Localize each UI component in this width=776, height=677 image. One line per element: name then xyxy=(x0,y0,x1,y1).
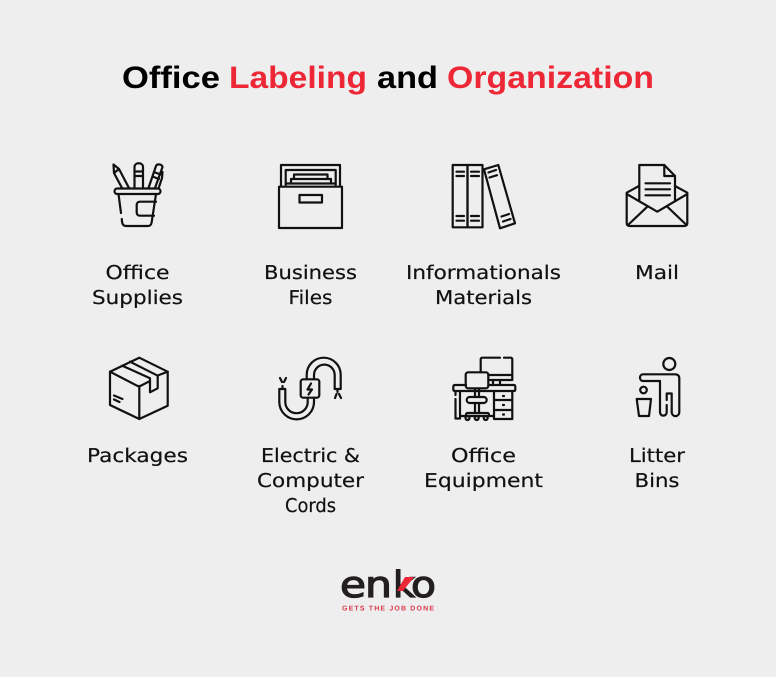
item: office equipment xyxy=(424,358,543,492)
icon: file drawer xyxy=(279,165,342,228)
title: and xyxy=(377,60,438,95)
wordmark: k xyxy=(393,565,415,606)
title: Labeling xyxy=(229,60,367,95)
title: Office xyxy=(122,60,220,95)
title: Organization xyxy=(447,60,654,95)
label: Litter xyxy=(629,445,685,467)
label xyxy=(92,262,183,309)
title xyxy=(122,60,654,95)
label: Cords xyxy=(285,495,336,517)
label xyxy=(257,445,364,517)
item: office supplies xyxy=(92,163,183,309)
wordmark: n xyxy=(365,565,392,606)
label: Mail xyxy=(635,262,679,284)
label: Informationals xyxy=(406,262,561,284)
icon: cardboard box xyxy=(110,358,168,419)
wordmark xyxy=(340,565,436,606)
item: litter bins xyxy=(629,358,685,492)
icon: binders xyxy=(453,165,515,228)
wordmark: o xyxy=(411,565,436,606)
label: Computer xyxy=(257,470,364,492)
label xyxy=(629,445,685,492)
wordmark: e xyxy=(340,565,366,606)
logo: enko xyxy=(340,565,436,612)
icon: desk with chair and monitor xyxy=(453,358,515,420)
label xyxy=(264,262,357,309)
icon: open envelope xyxy=(627,165,687,226)
icon: person throwing litter in bin xyxy=(637,358,679,416)
label: Electric & xyxy=(261,445,360,467)
label xyxy=(406,262,561,309)
item: mail xyxy=(627,165,687,284)
label: Supplies xyxy=(92,287,183,309)
label: Bins xyxy=(634,470,680,492)
item: electric and computer cords xyxy=(257,358,364,517)
icon: pencil cup xyxy=(114,163,162,226)
item: informationals materials xyxy=(406,165,561,309)
label: Equipment xyxy=(424,470,543,492)
label: Business xyxy=(264,262,357,284)
item: business files xyxy=(264,165,357,309)
tagline: GETS THE JOB DONE xyxy=(342,606,434,612)
icon: cable with plug xyxy=(279,358,341,419)
label: Files xyxy=(288,287,332,309)
label: Materials xyxy=(435,287,532,309)
label xyxy=(424,445,543,492)
label: Packages xyxy=(87,445,188,467)
label: Office xyxy=(106,262,170,284)
label: Office xyxy=(451,445,516,467)
item: packages xyxy=(87,358,188,467)
